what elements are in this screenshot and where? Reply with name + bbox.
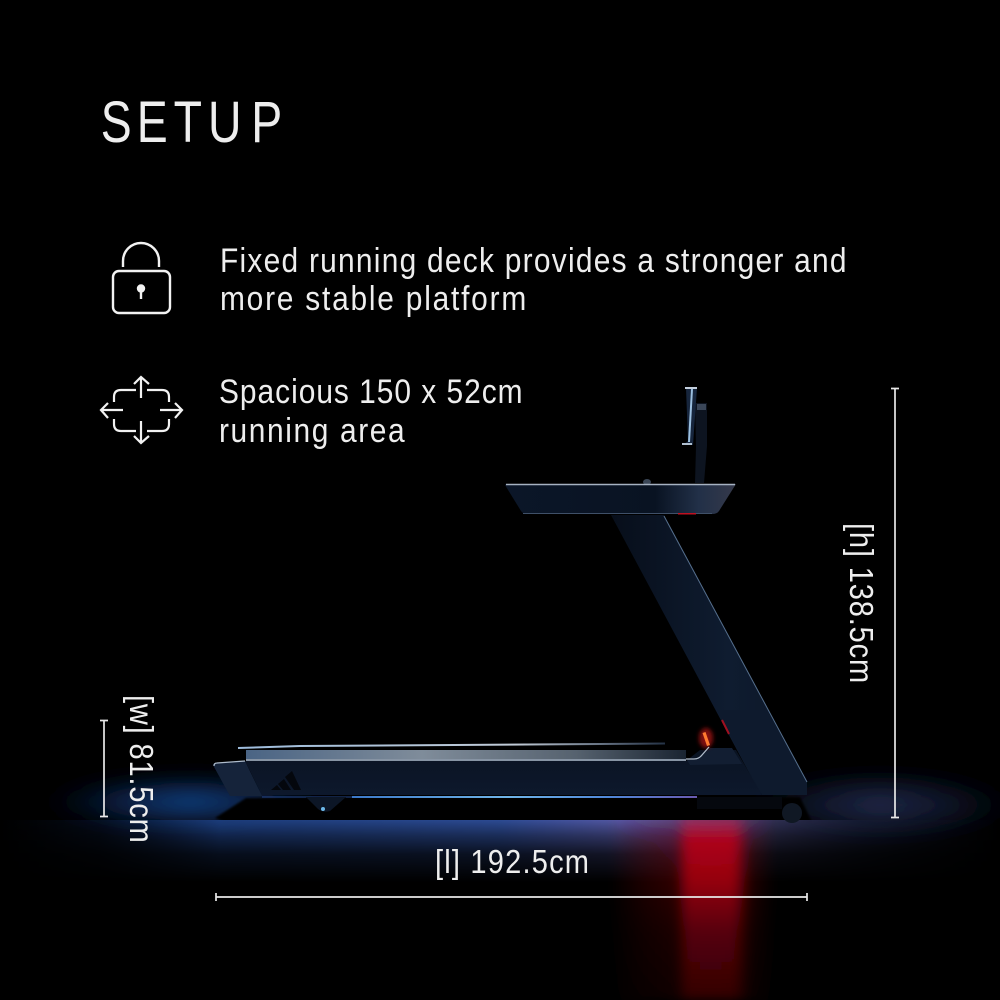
- deck body: [245, 750, 762, 795]
- running belt: [238, 744, 686, 760]
- console knob: [643, 479, 651, 485]
- red stem accent: [722, 720, 729, 734]
- text: spacious running area: running area: [219, 411, 405, 449]
- title: SETUP: [101, 90, 282, 155]
- deck left end cap: [213, 761, 262, 796]
- underside light strip: [352, 796, 697, 798]
- adidas logo: [271, 771, 301, 790]
- dimension: length: [l] 192.5cm: [435, 843, 589, 880]
- floor: red light reflection: [620, 820, 769, 1000]
- tablet holder: [695, 403, 707, 483]
- icon: expand arrows: [101, 377, 182, 443]
- text: spacious running area: Spacious 150 x 52cm: [219, 372, 523, 410]
- floor: shadow under treadmill: [215, 797, 812, 822]
- treadmill: [213, 387, 807, 823]
- floor: light band: [40, 820, 932, 876]
- text: fixed running deck: [220, 241, 847, 317]
- stem edge highlight: [664, 516, 807, 782]
- tablet screen: [682, 387, 697, 445]
- dimension: width: [100, 695, 160, 843]
- dimension: height: [h] 138.5cm: [843, 523, 880, 683]
- dimension: width: [w] 81.5cm: [123, 695, 160, 843]
- red indicator light: [702, 732, 710, 746]
- support stem: [611, 515, 807, 795]
- foot glow dot: [321, 807, 325, 811]
- text: fixed running deck: more stable platform: [220, 279, 526, 317]
- step plate: [687, 748, 742, 765]
- dimension: length: [216, 843, 807, 901]
- text: fixed running deck: Fixed running deck provides a stronger and: [220, 241, 847, 279]
- red indicator glow: [699, 728, 713, 748]
- belt end curve: [686, 747, 709, 759]
- console tray: [505, 484, 736, 514]
- icon: padlock: [113, 243, 170, 313]
- dimension: height: [843, 388, 899, 818]
- text: spacious running area: [219, 372, 523, 449]
- rear wheel: [782, 803, 802, 823]
- stem over deck: [717, 710, 807, 795]
- rear bracket: [697, 797, 782, 809]
- floor: side glows: [40, 769, 1000, 841]
- front foot: [306, 797, 346, 812]
